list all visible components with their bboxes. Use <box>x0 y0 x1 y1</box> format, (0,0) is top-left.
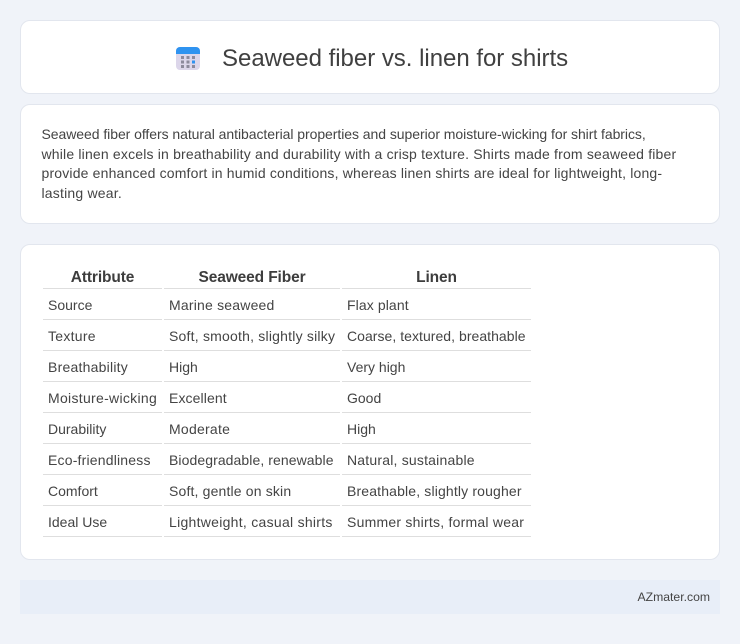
summary card <box>20 104 720 224</box>
comparison table: Very high <box>347 359 405 375</box>
row: ideal use <box>48 514 524 530</box>
comparison table: Good <box>347 390 381 406</box>
row: ideal use: Ideal Use <box>48 514 107 530</box>
row: texture: Texture <box>48 328 96 344</box>
row: durability <box>48 421 376 437</box>
row: moisture-wicking: Moisture-wicking <box>48 390 157 406</box>
footer credit: AZmater.com <box>638 590 710 604</box>
footer bar <box>20 580 720 614</box>
row: durability: Durability <box>48 421 106 437</box>
comparison table: Coarse, textured, breathable <box>347 328 526 344</box>
comparison table: Moderate <box>169 421 230 437</box>
comparison table: Excellent <box>169 390 227 406</box>
header: attribute: Attribute <box>71 269 134 286</box>
summary text: Seaweed fiber offers natural antibacterial properties and superior moisture-wicking for shirt fabrics, <box>42 126 646 142</box>
row: moisture-wicking <box>48 390 381 406</box>
table card <box>20 244 720 560</box>
row: eco-friendliness: Eco-friendliness <box>48 452 151 468</box>
summary text: provide enhanced comfort in humid conditions, whereas linen shirts are ideal for lightweight, long- <box>42 165 662 181</box>
header: linen: Linen <box>416 269 457 286</box>
comparison table: Soft, smooth, slightly silky <box>169 328 335 344</box>
row: breathability: Breathability <box>48 359 128 375</box>
comparison table: Marine seaweed <box>169 297 275 313</box>
row: eco-friendliness <box>48 452 475 468</box>
comparison table: Natural, sustainable <box>347 452 475 468</box>
row: source <box>48 297 409 313</box>
comparison table: Lightweight, casual shirts <box>169 514 333 530</box>
summary text: lasting wear. <box>42 184 122 200</box>
comparison table: Breathable, slightly rougher <box>347 483 522 499</box>
comparison table: High <box>169 359 198 375</box>
title: Seaweed fiber vs. linen for shirts <box>222 45 568 72</box>
comparison table: Soft, gentle on skin <box>169 483 291 499</box>
comparison table: Biodegradable, renewable <box>169 452 334 468</box>
comparison table: Summer shirts, formal wear <box>347 514 524 530</box>
row: source: Source <box>48 297 92 313</box>
row: comfort <box>48 483 522 499</box>
title card <box>20 20 720 94</box>
header: seaweed fiber: Seaweed Fiber <box>198 269 306 286</box>
row: texture <box>48 328 526 344</box>
comparison table: Flax plant <box>347 297 409 313</box>
summary text <box>42 126 676 201</box>
row: breathability <box>48 359 405 375</box>
row: comfort: Comfort <box>48 483 98 499</box>
icon: calendar <box>176 47 200 70</box>
comparison table: High <box>347 421 376 437</box>
summary text: while linen excels in breathability and durability with a crisp texture. Shirts made from seaweed fiber <box>42 146 676 162</box>
